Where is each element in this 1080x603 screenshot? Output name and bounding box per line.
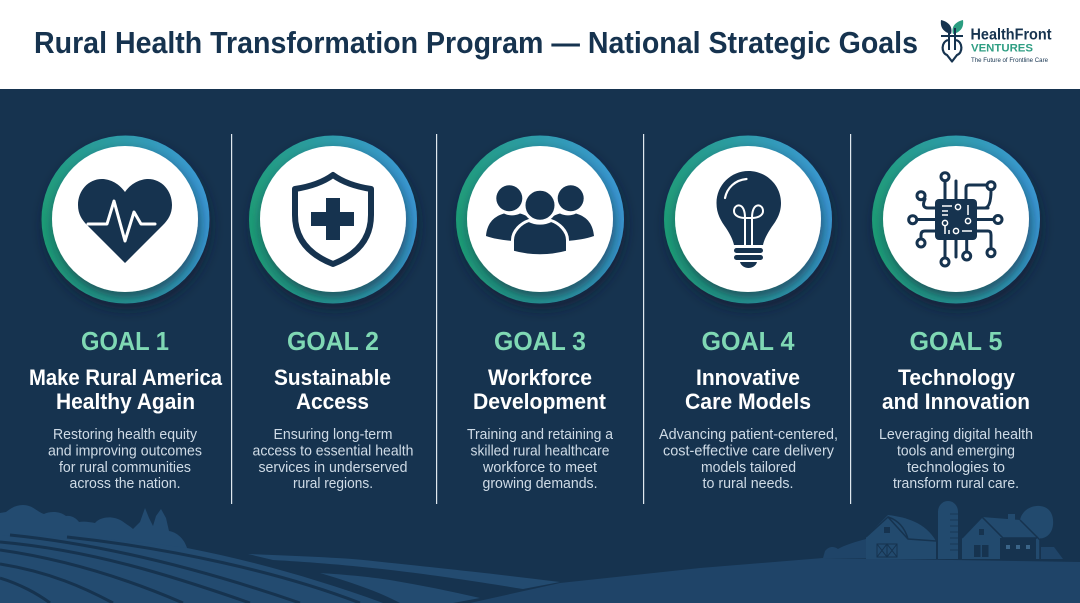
logo wordmark: HealthFront <box>970 26 1052 44</box>
goal 4 label: GOAL 4 <box>702 326 795 356</box>
goal 5 heading <box>882 365 1030 414</box>
panel: goal 1 <box>29 136 222 492</box>
panel: goal 5 <box>872 136 1040 492</box>
farmhouse <box>962 514 1063 559</box>
goal 3 description <box>467 427 614 492</box>
header bar <box>0 0 1080 89</box>
logo tagline: The Future of Frontline Care <box>971 57 1048 64</box>
goal 2 description: rural regions. <box>293 476 373 492</box>
panel: goal 2 <box>249 136 417 492</box>
goal 1 description: and improving outcomes <box>48 444 202 460</box>
goal 4 heading: Innovative <box>696 365 800 390</box>
goal 1 heading <box>29 365 222 414</box>
goal 4 description: cost-effective care delivery <box>663 444 835 460</box>
goal 3 description: growing demands. <box>482 476 598 492</box>
goal 1 description <box>48 427 202 492</box>
goal 3 description: workforce to meet <box>482 460 597 476</box>
icon badge 4 <box>664 136 832 304</box>
icon badge 2 <box>249 136 417 304</box>
tree <box>1020 506 1053 538</box>
goal 1 description: across the nation. <box>70 476 180 492</box>
goal 5 description <box>879 427 1033 492</box>
icon: heart with pulse <box>78 179 172 263</box>
icon: light bulb <box>716 171 781 268</box>
icon: circuit chip <box>909 173 1002 266</box>
goal 3 description: Training and retaining a <box>467 427 614 443</box>
goal 5 description: technologies to <box>907 460 1005 476</box>
goal 2 description <box>252 427 414 492</box>
icon badge 1 <box>42 136 210 304</box>
panel: goal 4 <box>659 136 838 492</box>
icon badge 3 <box>456 136 624 304</box>
logo icon <box>941 20 963 62</box>
goal 4 description <box>659 427 838 492</box>
goal 2 heading <box>274 365 391 414</box>
goal 4 heading <box>685 365 811 414</box>
goal 2 label: GOAL 2 <box>287 326 379 356</box>
goal 2 description: Ensuring long-term <box>274 427 392 443</box>
landscape right: ground and farm <box>470 501 1080 603</box>
barn <box>866 515 936 559</box>
goal 5 heading: and Innovation <box>882 389 1030 414</box>
goal 4 description: Advancing patient-centered, <box>659 427 838 443</box>
title: Rural Health Transformation Program — National Strategic Goals <box>34 25 918 60</box>
goal 5 description: Leveraging digital health <box>879 427 1033 443</box>
goal 3 heading <box>473 365 606 414</box>
logo: HealthFront Ventures <box>941 20 1052 64</box>
goal 3 heading: Workforce <box>488 365 592 390</box>
divider 4 <box>850 134 851 504</box>
goal 5 description: tools and emerging <box>897 444 1015 460</box>
goal 5 label: GOAL 5 <box>910 326 1002 356</box>
goal 1 description: Restoring health equity <box>53 427 198 443</box>
bushes <box>823 539 870 558</box>
goal 1 heading: Make Rural America <box>29 365 222 390</box>
goal 1 heading: Healthy Again <box>56 389 195 414</box>
goal 4 description: models tailored <box>701 460 796 476</box>
icon: shield with cross <box>295 175 371 264</box>
landscape left: tree line and farm field <box>0 505 560 603</box>
panel: goal 3 <box>456 136 624 492</box>
silo <box>938 501 958 559</box>
goal 3 description: skilled rural healthcare <box>470 444 610 460</box>
goal 4 heading: Care Models <box>685 389 811 414</box>
goal 5 heading: Technology <box>898 365 1015 390</box>
goal 4 description: to rural needs. <box>702 476 794 492</box>
goal 2 heading: Access <box>296 389 369 414</box>
logo sub-brand: VENTURES <box>971 42 1033 54</box>
goal 5 description: transform rural care. <box>893 476 1019 492</box>
divider 2 <box>436 134 437 504</box>
goal 2 heading: Sustainable <box>274 365 391 390</box>
goal 2 description: services in underserved <box>258 460 408 476</box>
goal 2 description: access to essential health <box>252 444 414 460</box>
icon badge 5 <box>872 136 1040 304</box>
divider 3 <box>643 134 644 504</box>
goal 1 label: GOAL 1 <box>81 326 169 356</box>
goal 3 heading: Development <box>473 389 606 414</box>
divider 1 <box>231 134 232 504</box>
goal 1 description: for rural communities <box>59 460 191 476</box>
goal 3 label: GOAL 3 <box>494 326 586 356</box>
icon: three people <box>486 185 594 256</box>
